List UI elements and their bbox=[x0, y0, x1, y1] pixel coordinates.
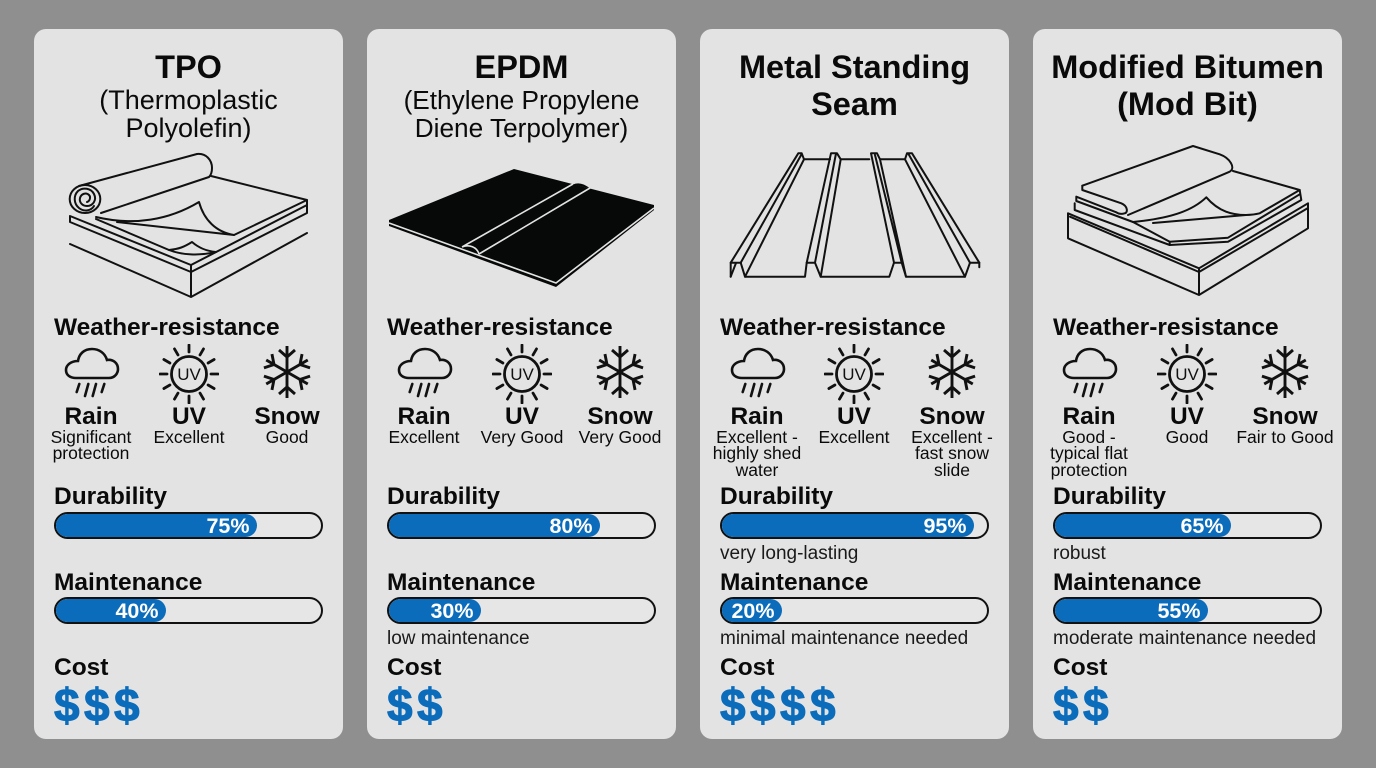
panel: Modified Bitumen bbox=[1033, 29, 1342, 739]
heading: Cost: Cost bbox=[1053, 654, 1107, 681]
rating text bbox=[911, 426, 993, 480]
rating text: Fair to Good bbox=[1236, 426, 1334, 446]
note: minimal maintenance needed bbox=[720, 628, 968, 649]
label: Snow: Snow bbox=[254, 403, 320, 430]
bar: 75% bbox=[54, 512, 323, 539]
bar: 65%: 65% bbox=[1180, 514, 1224, 538]
icon: UV sun: UV bbox=[177, 365, 201, 384]
durability meter bbox=[54, 483, 323, 539]
illustration: TPO membrane roll bbox=[68, 152, 308, 298]
heading: Weather-resistance: Weather-resistance bbox=[1053, 314, 1279, 341]
icon: UV sun bbox=[1157, 344, 1217, 404]
label: Snow: Snow bbox=[1252, 403, 1318, 430]
bar: 40%: 40% bbox=[115, 599, 158, 623]
note: moderate maintenance needed bbox=[1053, 628, 1316, 649]
icon: rain cloud bbox=[64, 348, 120, 398]
label: Rain: Rain bbox=[397, 403, 451, 430]
cost symbols: $$$ bbox=[54, 679, 144, 731]
note: robust bbox=[1053, 543, 1106, 564]
rating text: Excellent bbox=[153, 426, 224, 446]
title: Metal Standing Seam bbox=[739, 48, 970, 122]
icon: rain cloud bbox=[398, 348, 452, 398]
icon: UV sun: UV bbox=[1175, 365, 1199, 384]
heading: Maintenance: Maintenance bbox=[54, 569, 202, 596]
rating text: slide bbox=[934, 460, 970, 480]
bar: 95% bbox=[720, 512, 989, 539]
rating text: Good bbox=[1166, 426, 1208, 446]
rain rating bbox=[1050, 348, 1128, 480]
label: Rain: Rain bbox=[1062, 403, 1116, 430]
illustration: standing seam metal roof bbox=[730, 152, 980, 278]
label: Rain: Rain bbox=[730, 403, 784, 430]
subtitle: Ethylene Propylene Diene Terpolymer bbox=[404, 84, 639, 142]
bar: 95%: 95% bbox=[923, 514, 966, 538]
icon: rain cloud bbox=[730, 348, 786, 398]
icon: UV sun bbox=[159, 344, 219, 404]
maintenance meter bbox=[720, 569, 989, 649]
label: UV: UV bbox=[172, 403, 206, 430]
snow rating bbox=[578, 346, 661, 446]
UV rating bbox=[480, 344, 563, 446]
subtitle: Ethylene Propylene Diene Terpolymer: (Ethylene Propylene bbox=[404, 84, 639, 114]
title: Metal Standing Seam: Seam bbox=[811, 86, 898, 122]
icon: UV sun bbox=[824, 344, 884, 404]
durability meter bbox=[1053, 483, 1323, 563]
panel: TPO bbox=[34, 29, 343, 739]
label: UV: UV bbox=[837, 403, 871, 430]
subtitle: Thermoplastic Polyolefin bbox=[99, 84, 278, 142]
icon: snowflake bbox=[928, 346, 976, 398]
rating text: Excellent - bbox=[716, 426, 798, 446]
heading: Durability: Durability bbox=[720, 483, 833, 510]
rain rating bbox=[51, 348, 132, 463]
bar: 20% bbox=[720, 597, 989, 624]
cost symbols: $$ bbox=[1053, 679, 1113, 731]
snow rating bbox=[911, 346, 993, 480]
label: UV: UV bbox=[1170, 403, 1204, 430]
note: very long-lasting bbox=[720, 543, 858, 564]
rating text bbox=[1029, 428, 1149, 478]
rain rating bbox=[388, 348, 460, 446]
bar: 80% bbox=[387, 512, 656, 539]
rating text: highly shed bbox=[713, 443, 801, 463]
rating text: typical flat bbox=[1050, 443, 1128, 463]
cost symbols: $$$$ bbox=[720, 679, 840, 731]
title: Modified Bitumen bbox=[1051, 48, 1324, 122]
heading: Maintenance: Maintenance bbox=[720, 569, 868, 596]
heading: Durability: Durability bbox=[1053, 483, 1166, 510]
bar: 75%: 75% bbox=[206, 514, 250, 538]
heading: Maintenance: Maintenance bbox=[387, 569, 535, 596]
heading: Weather-resistance: Weather-resistance bbox=[720, 314, 946, 341]
UV rating bbox=[818, 344, 890, 446]
rain rating bbox=[713, 348, 801, 480]
subtitle: Ethylene Propylene Diene Terpolymer: Diene Terpolymer) bbox=[415, 112, 628, 142]
heading: Cost: Cost bbox=[720, 654, 774, 681]
bar: 40% bbox=[54, 597, 323, 624]
label: Snow: Snow bbox=[919, 403, 985, 430]
icon: UV sun: UV bbox=[842, 365, 866, 384]
icon: UV sun bbox=[492, 344, 552, 404]
rating text: Excellent bbox=[818, 426, 890, 446]
rating text: Excellent bbox=[388, 426, 460, 446]
rating text: fast snow bbox=[915, 443, 989, 463]
bar: 55%: 55% bbox=[1157, 599, 1200, 623]
cost rating bbox=[387, 654, 447, 731]
note: low maintenance bbox=[387, 628, 530, 649]
panel: Metal Standing Seam bbox=[700, 29, 1009, 739]
rating text: Good - bbox=[1062, 426, 1116, 446]
title: EPDM: EPDM bbox=[475, 48, 568, 84]
durability meter bbox=[720, 483, 989, 564]
rating text: protection bbox=[53, 443, 129, 463]
snow rating bbox=[1235, 339, 1335, 475]
cost rating bbox=[1053, 654, 1253, 734]
illustration: modified bitumen layers bbox=[1067, 145, 1309, 296]
title: Modified Bitumen: Modified Bitumen bbox=[1051, 48, 1324, 84]
subtitle: Thermoplastic Polyolefin: (Thermoplastic bbox=[99, 84, 278, 114]
rating text: protection bbox=[1051, 460, 1127, 480]
cost symbols: $$ bbox=[387, 679, 447, 731]
rating text: Significant bbox=[51, 426, 131, 446]
UV rating bbox=[1137, 339, 1237, 475]
cost rating bbox=[54, 654, 144, 731]
bar: 80%: 80% bbox=[549, 514, 592, 538]
icon: snowflake bbox=[596, 346, 644, 398]
panel: EPDM bbox=[367, 29, 676, 739]
rating text: Good bbox=[266, 426, 308, 446]
UV rating bbox=[153, 344, 224, 446]
heading: Weather-resistance: Weather-resistance bbox=[387, 314, 613, 341]
rating text: Very Good bbox=[481, 426, 563, 446]
bar: 65% bbox=[1053, 512, 1322, 539]
rating text: water bbox=[736, 460, 778, 480]
heading: Weather-resistance: Weather-resistance bbox=[54, 314, 280, 341]
maintenance meter bbox=[1053, 569, 1323, 649]
maintenance meter bbox=[387, 569, 656, 649]
cost rating bbox=[720, 654, 840, 731]
durability meter bbox=[387, 483, 656, 539]
illustration: EPDM black sheet bbox=[389, 169, 654, 287]
heading: Maintenance: Maintenance bbox=[1053, 569, 1201, 596]
rating text bbox=[713, 426, 801, 480]
icon: snowflake bbox=[1255, 342, 1315, 402]
heading: Cost: Cost bbox=[387, 654, 441, 681]
heading: Durability: Durability bbox=[387, 483, 500, 510]
heading: Durability: Durability bbox=[54, 483, 167, 510]
icon: snowflake bbox=[264, 346, 310, 398]
title: Metal Standing Seam: Metal Standing bbox=[739, 48, 970, 84]
rating text: Very Good bbox=[579, 426, 661, 446]
label: UV: UV bbox=[505, 403, 539, 430]
bar: 30% bbox=[387, 597, 656, 624]
bar: 20%: 20% bbox=[731, 599, 774, 623]
title: Modified Bitumen: (Mod Bit) bbox=[1117, 86, 1258, 122]
rating text bbox=[51, 426, 132, 463]
label: Snow: Snow bbox=[587, 403, 653, 430]
heading: Cost: Cost bbox=[54, 654, 108, 681]
label: Rain: Rain bbox=[64, 403, 118, 430]
title: TPO: TPO bbox=[155, 48, 222, 84]
icon: UV sun: UV bbox=[510, 365, 534, 384]
snow rating bbox=[254, 346, 320, 446]
rating text: Excellent - bbox=[911, 426, 993, 446]
icon: rain cloud bbox=[1062, 348, 1118, 398]
bar: 55% bbox=[1053, 597, 1322, 624]
bar: 30%: 30% bbox=[430, 599, 474, 623]
subtitle: Thermoplastic Polyolefin: Polyolefin) bbox=[125, 112, 252, 142]
maintenance meter bbox=[54, 569, 323, 624]
